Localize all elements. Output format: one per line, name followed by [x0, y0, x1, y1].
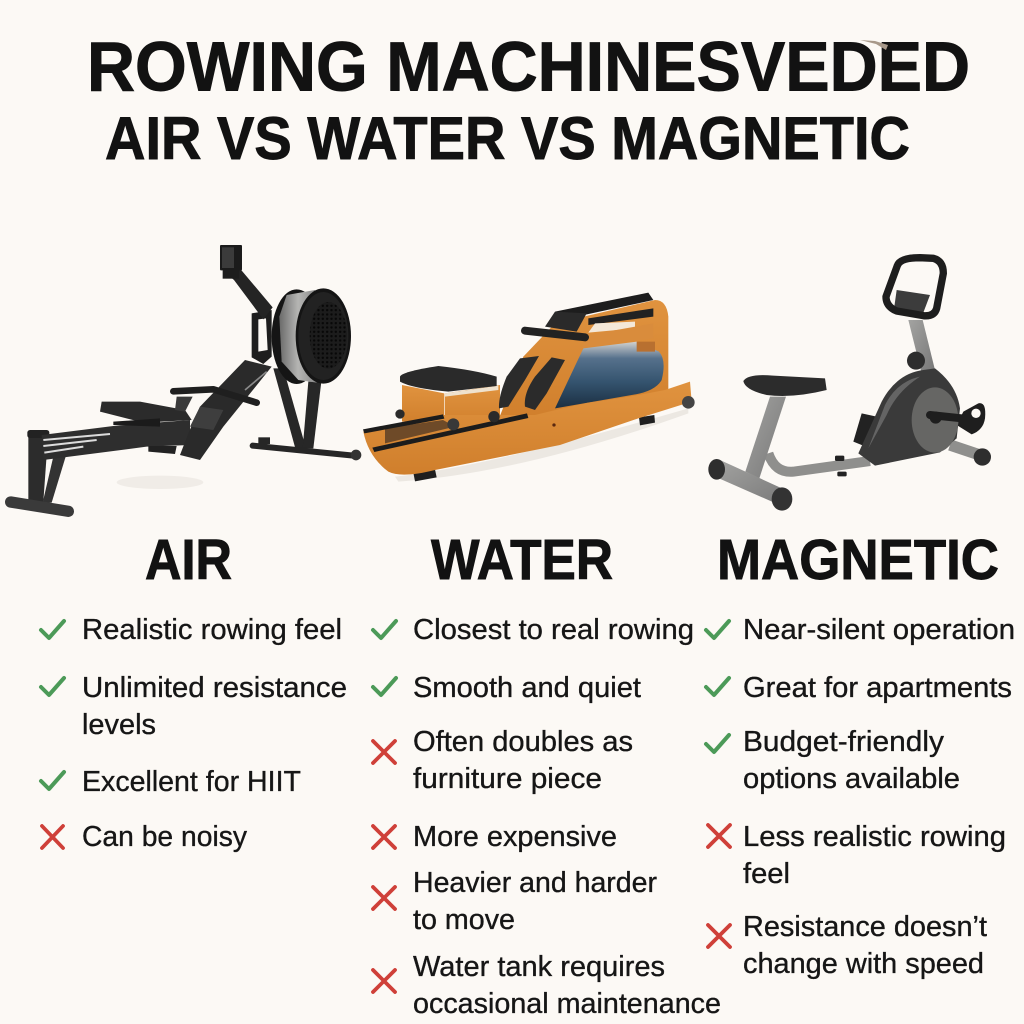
illustration: air rower [11, 245, 361, 511]
list item: pro: Realistic rowing feel [82, 614, 342, 646]
list item: pro: Closest to real rowing [413, 614, 694, 646]
panel: water [363, 293, 721, 1020]
list item: con [373, 951, 721, 1020]
list item: con: to move [413, 904, 515, 936]
list item: con [373, 867, 657, 936]
list item: pro: Great for apartments [743, 672, 1012, 704]
list item: con: Water tank requires [413, 951, 665, 983]
heading: water: WATER [431, 528, 613, 592]
list item: con: Heavier and harder [413, 867, 657, 899]
list item: con [708, 821, 1006, 890]
list item: pro: Smooth and quiet [413, 672, 641, 704]
list item: pro: levels [82, 709, 156, 741]
list item: con: Can be noisy [82, 821, 247, 853]
subtitle: AIR VS WATER VS MAGNETIC [105, 105, 910, 172]
list item: con: furniture piece [413, 763, 602, 795]
heading: magnetic: MAGNETIC [717, 528, 999, 592]
illustration: magnetic bike [708, 258, 991, 511]
list item: pro: Unlimited resistance [82, 672, 347, 704]
list item: pro [41, 672, 347, 741]
list item: con: feel [743, 858, 790, 890]
list item: pro: Near-silent operation [743, 614, 1015, 646]
list item: con: More expensive [413, 821, 617, 853]
list item: con: Less realistic rowing [743, 821, 1006, 853]
panel: air [11, 245, 361, 853]
list item: pro: Budget-friendly [743, 726, 945, 758]
list item: pro: Excellent for HIIT [82, 766, 301, 798]
list item: con [373, 726, 633, 795]
list item: con: Resistance doesn’t [743, 911, 987, 943]
list item: con: Often doubles as [413, 726, 633, 758]
list item: pro: options available [743, 763, 960, 795]
list item: con: change with speed [743, 948, 984, 980]
panel: magnetic [706, 258, 1015, 980]
heading: air: AIR [145, 528, 232, 592]
list item: con: occasional maintenance [413, 988, 721, 1020]
illustration: water rower [363, 293, 695, 482]
title: ROWING MACHINESVEDED [87, 28, 970, 106]
list item: con [708, 911, 987, 980]
list item: pro [706, 726, 960, 795]
